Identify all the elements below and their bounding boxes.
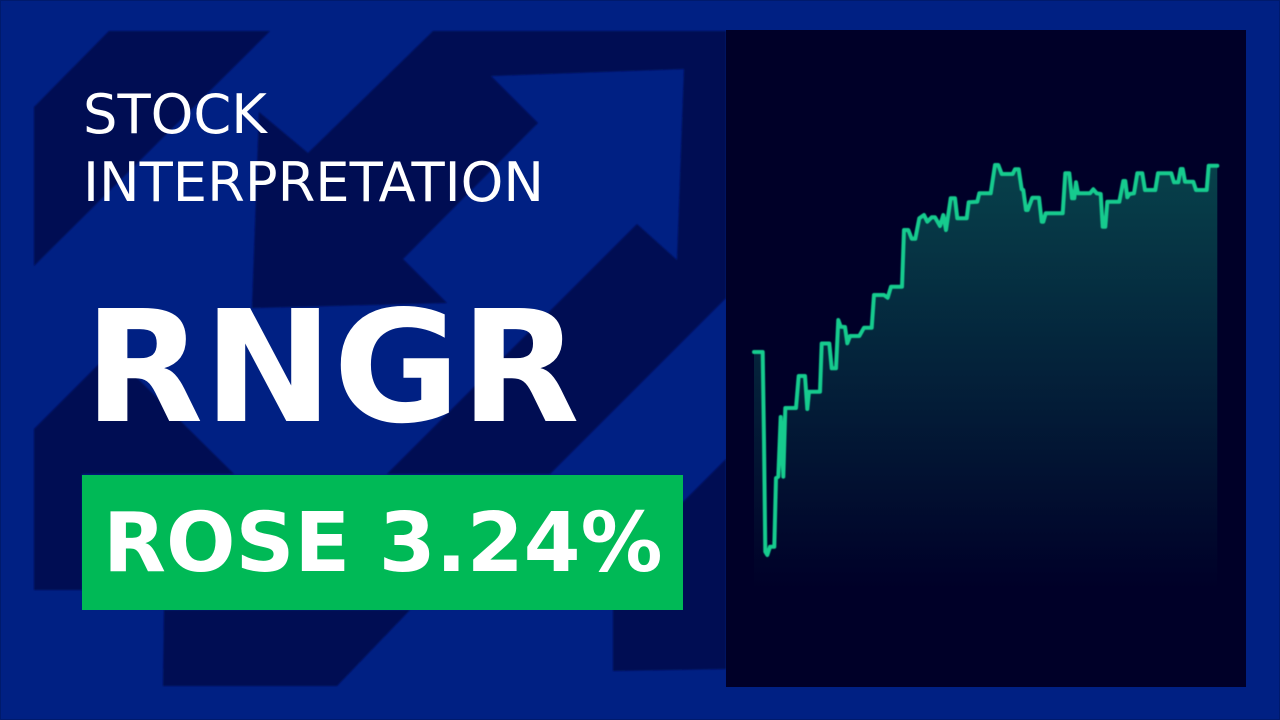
chart price line [754,165,1217,555]
background arrows [34,31,726,686]
heading: stock interpretation [83,83,544,214]
ticker: RNGR: RNGR [84,277,580,458]
callout: rose 3.24% [82,475,683,610]
callout: rose 3.24%: ROSE 3.24% [103,496,663,591]
panel: price chart [726,30,1246,687]
heading: stock interpretation: STOCK [83,83,268,146]
heading: stock interpretation: INTERPRETATION [83,151,544,214]
chart area fill [754,165,1217,600]
